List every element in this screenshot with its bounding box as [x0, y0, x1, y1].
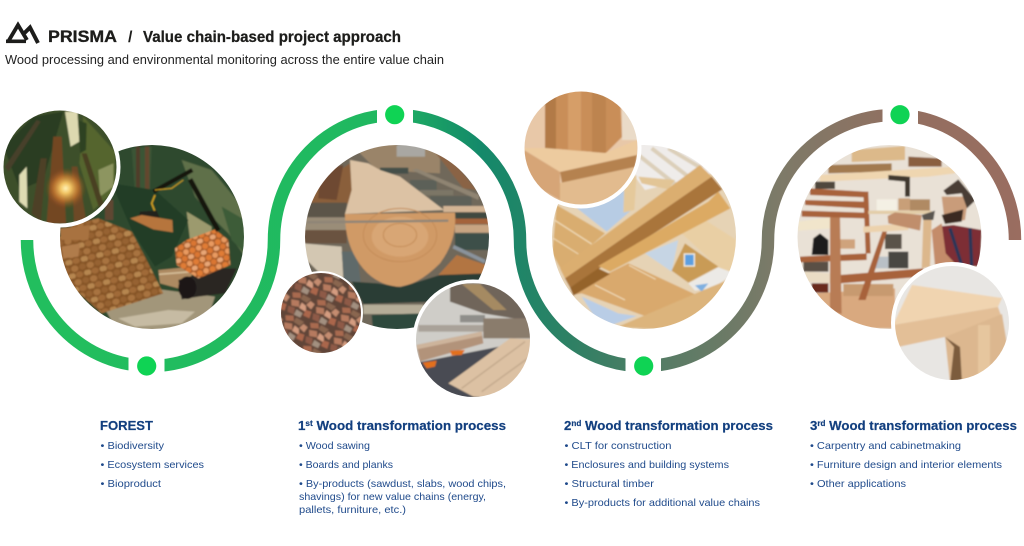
bullet list: third transformation: • Carpentry and cabinetmaking — [810, 440, 961, 452]
bullet list: first transformation: • Wood sawing — [299, 440, 370, 452]
heading: first transformation: st — [305, 419, 313, 428]
slash separator: / — [128, 29, 133, 46]
heading: second transformation: Wood transformation process — [581, 418, 773, 433]
bullet list: second transformation — [564, 440, 760, 509]
bullet list: third transformation — [810, 440, 1002, 490]
flow node: second transformation — [626, 350, 661, 382]
bullet list: second transformation: • Structural timber — [564, 478, 655, 490]
bullet list: second transformation: • By-products for additional value chains — [564, 497, 760, 509]
bullet list: forest: • Bioproduct — [100, 478, 161, 490]
icon: PRISMA mountain logo — [6, 25, 38, 43]
heading: second transformation: 2 — [564, 418, 571, 433]
bullet list: forest — [100, 440, 204, 490]
photo: timber roof structure — [552, 145, 736, 329]
heading: third transformation: rd — [817, 419, 826, 428]
bullet list: third transformation: • Other applications — [810, 478, 906, 490]
heading: second transformation: nd — [571, 419, 581, 428]
flow node: third transformation — [882, 100, 918, 132]
bullet list: first transformation: shavings) for new value chains (energy, — [299, 491, 486, 503]
heading: third transformation: 3 — [810, 418, 817, 433]
bullet list: forest: • Biodiversity — [100, 440, 165, 452]
photo: sawn boards in timber yard — [412, 280, 534, 400]
text block: third transformation — [810, 418, 1017, 490]
heading: forest: FOREST — [100, 418, 153, 433]
subtitle: Wood processing and environmental monitoring across the entire value chain — [5, 52, 444, 67]
header: logo and title — [6, 25, 401, 46]
photo: forest logging machine — [60, 145, 244, 329]
photo: wooden table corner — [891, 262, 1013, 384]
text block: second transformation — [564, 418, 773, 509]
heading: first transformation: Wood transformation process — [313, 418, 506, 433]
photo: log on sawmill line — [305, 145, 489, 329]
heading: first transformation: 1 — [298, 418, 305, 433]
heading: third transformation: Wood transformation process — [825, 418, 1017, 433]
logo wordmark: PRISMA — [48, 27, 117, 46]
title: Value chain-based project approach — [143, 29, 401, 46]
bullet list: first transformation — [299, 440, 506, 516]
bullet list: forest: • Ecosystem services — [100, 459, 204, 471]
flow node: forest — [128, 350, 164, 382]
photo: forest canopy with sun — [0, 106, 120, 228]
photo: CLT panel — [520, 88, 642, 208]
bullet list: first transformation: • Boards and planks — [299, 459, 393, 471]
photo: wood chips — [279, 271, 363, 355]
bullet list: second transformation: • Enclosures and building systems — [564, 459, 729, 471]
text block: forest — [100, 418, 204, 490]
bullet list: first transformation: • By-products (sawdust, slabs, wood chips, — [299, 478, 506, 490]
value chain flow line — [27, 115, 1015, 366]
photo: carpenter in workshop — [798, 145, 982, 329]
text block: first transformation — [298, 418, 506, 516]
bullet list: second transformation: • CLT for construction — [564, 440, 672, 452]
bullet list: first transformation: pallets, furniture, etc.) — [299, 504, 406, 516]
flow node: first transformation — [377, 100, 413, 132]
bullet list: third transformation: • Furniture design and interior elements — [810, 459, 1002, 471]
